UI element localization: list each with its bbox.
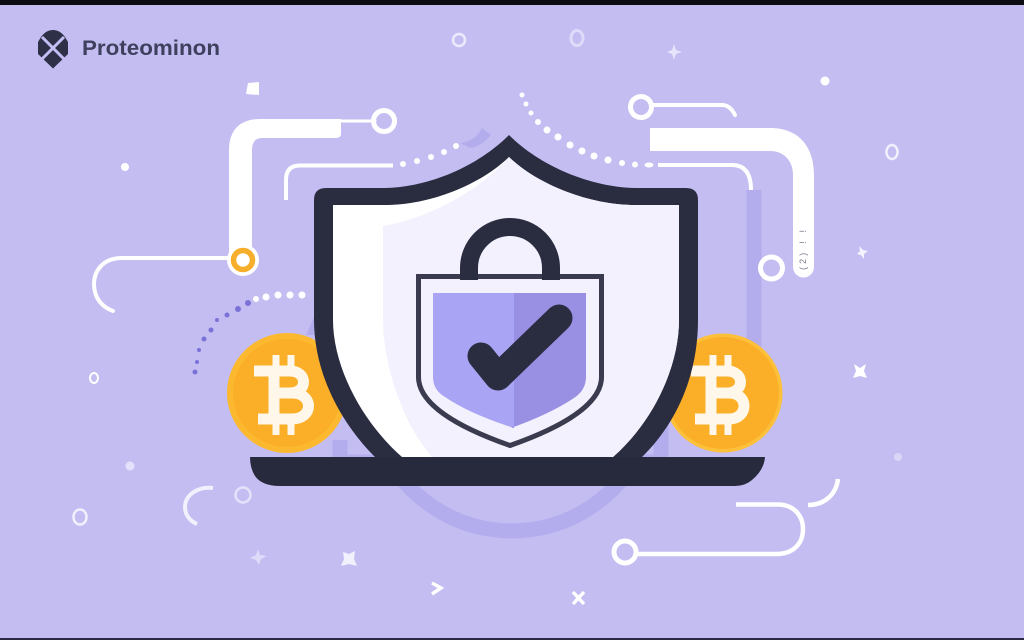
icon: bitcoin symbol (691, 355, 744, 435)
lower right circuit line (614, 479, 838, 563)
laptop base bar (250, 457, 765, 486)
right dotted arc (520, 92, 654, 168)
inner thin line (286, 166, 393, 200)
icon: check mark (481, 318, 559, 377)
pipe micro text: (2) ! ! (798, 230, 808, 270)
top node ring (374, 110, 394, 132)
shield white face (333, 157, 679, 457)
orange node (227, 244, 259, 276)
left white dotted arc (253, 143, 459, 302)
shield light face (383, 157, 679, 457)
left circuit lines (94, 110, 394, 311)
logo wordmark: Proteominon (82, 37, 220, 60)
padlock (418, 227, 602, 446)
thin line (658, 165, 751, 190)
bitcoin coin right (664, 334, 782, 452)
icon: bitcoin symbol (254, 355, 308, 435)
logo (38, 30, 220, 68)
inner shield left half (433, 293, 514, 428)
bitcoin coin left (227, 333, 347, 453)
lock body outline (418, 276, 602, 446)
purple dotted arc (192, 300, 251, 374)
shackle (469, 227, 551, 277)
right circuit lines (630, 96, 814, 279)
thick white pipe (650, 128, 814, 278)
inner shield right half (511, 293, 586, 428)
shield outline (314, 135, 698, 457)
decorative small shapes (74, 30, 902, 604)
shield (314, 135, 698, 457)
background ring behind shield (306, 128, 754, 531)
top node with line (630, 96, 735, 118)
thin curved line (94, 258, 232, 311)
icon: logo mark (38, 30, 68, 68)
thick white pipe (229, 119, 341, 260)
lower node ring (760, 257, 782, 279)
connector to top node (341, 120, 375, 122)
